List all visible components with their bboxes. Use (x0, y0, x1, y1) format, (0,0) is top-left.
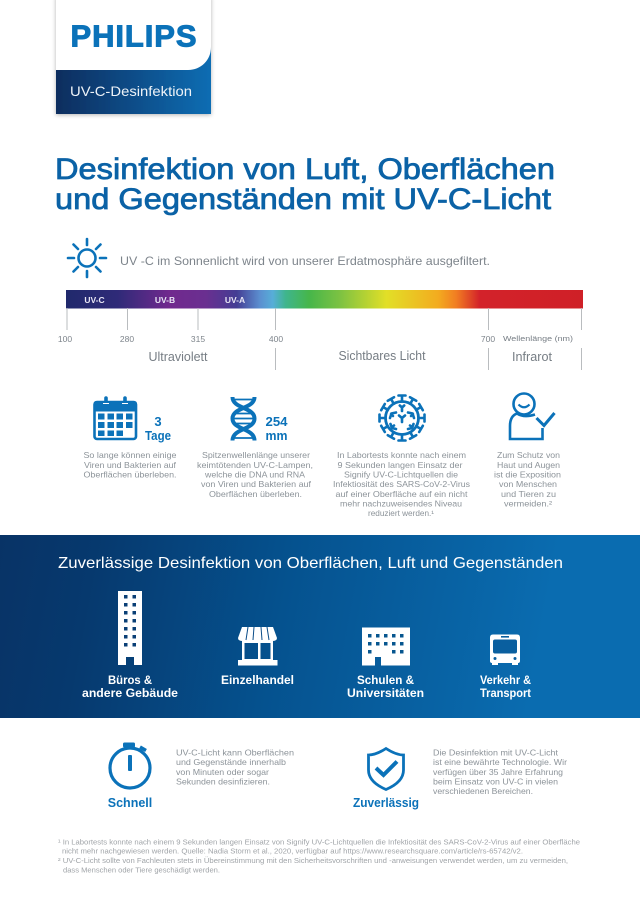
label: transport (480, 675, 531, 700)
figure: mm (266, 428, 288, 443)
band labels: UV-C (84, 295, 105, 305)
label: offices: andere Gebäude (82, 688, 178, 700)
fact: 3 days (84, 398, 177, 480)
range labels (148, 349, 553, 364)
icon: calendar (94, 398, 137, 439)
description: auf einer Oberfläche auf ein nicht (336, 490, 468, 499)
description: verschiedenen Bereichen. (433, 787, 533, 796)
figure: 254 (266, 414, 288, 429)
description: mehr nachzuweisendes Niveau (340, 500, 462, 508)
benefit: fast (108, 742, 294, 810)
description: Oberflächen überleben. (209, 490, 302, 499)
wavelength labels (58, 334, 573, 344)
description: keimtötenden UV-C-Lampen, (197, 461, 313, 470)
icon: shield with check (368, 748, 404, 790)
heading: Zuverlässig (353, 796, 419, 810)
description: Spitzenwellenlänge unserer (202, 451, 310, 460)
panel: applications band (0, 535, 640, 718)
title: und Gegenständen mit UV-C-Licht (55, 183, 552, 216)
fact: protection (494, 394, 561, 508)
description: und Tieren zu (501, 490, 556, 499)
band labels: UV-B (155, 295, 175, 305)
wavelength labels: Wellenlänge (nm) (503, 334, 573, 343)
description: 9 Sekunden langen Einsatz der (338, 461, 463, 470)
range labels: Sichtbares Licht (338, 349, 426, 363)
description: ist eine bewährte Technologie. Wir (433, 758, 567, 767)
description: und Gegenstände innerhalb (176, 758, 286, 767)
logo wordmark: PHILIPS (70, 18, 196, 54)
range labels: Ultraviolett (148, 350, 208, 364)
label: transport: Transport (480, 688, 531, 700)
description: So lange können einige (84, 451, 177, 460)
description (494, 451, 561, 508)
icon: office tower (118, 591, 142, 665)
description (176, 748, 294, 786)
description (197, 451, 313, 499)
description: verfügen über 35 Jahre Erfahrung (433, 768, 563, 777)
band heading: Zuverlässige Desinfektion von Oberflächen, Luft und Gegenständen (58, 555, 563, 572)
title (55, 153, 555, 216)
description: Signify UV-C-Lichtquellen die (344, 470, 458, 480)
band labels: UV-A (225, 295, 245, 305)
wavelength labels: 400 (269, 334, 283, 344)
description: von Minuten oder sogar (176, 768, 269, 777)
description: Haut und Augen (497, 461, 560, 470)
wavelength labels: 100 (58, 334, 72, 344)
description: Die Desinfektion mit UV-C-Licht (433, 748, 559, 758)
fact: virus inactivation (333, 396, 470, 518)
description: Viren und Bakterien auf (84, 461, 177, 470)
description: welche die DNA und RNA (204, 470, 306, 480)
description: von Menschen (499, 480, 557, 489)
description: vermeiden.² (504, 500, 552, 508)
description: Infektiosität des SARS-CoV-2-Virus (333, 480, 470, 489)
label: offices: Büros & (108, 675, 152, 687)
heading: Schnell (108, 796, 152, 810)
description (433, 748, 567, 796)
footnotes: ¹ In Labortests konnte nach einem 9 Sekunden langen Einsatz von Signify UV-C-Lichtquellen die Infektiosität des SARS-CoV-2-Virus auf einer Oberfläche (58, 840, 580, 846)
figure (266, 414, 288, 443)
description (333, 451, 470, 518)
band labels (84, 295, 245, 305)
icon: virus (380, 396, 424, 440)
wavelength labels: 315 (191, 334, 205, 344)
footnotes: dass Menschen oder Tiere geschädigt werden. (63, 868, 220, 874)
icon: sun (68, 239, 106, 277)
description: UV-C-Licht kann Oberflächen (176, 748, 294, 758)
Philips logo tab (56, 0, 211, 114)
description: ist die Exposition (494, 470, 561, 480)
figure: 3 (154, 414, 162, 429)
description: Sekunden desinfizieren. (176, 778, 270, 786)
footnotes (58, 840, 580, 874)
description: In Labortests konnte nach einem (337, 451, 466, 460)
description: reduziert werden.¹ (368, 509, 434, 518)
footnotes: ² UV-C-Licht sollte von Fachleuten stets in Übereinstimmung mit den Sicherheitsvorschriften und -anweisungen verwendet werden, um zu vermeiden, (58, 857, 568, 865)
footnotes: nicht mehr nachgewiesen werden. Quelle: Nadia Storm et al., 2020, verfügbar auf https://www.researchsquare.com/article/rs-65742/v2. (62, 848, 523, 856)
description (84, 451, 177, 480)
label: schools: Universitäten (347, 688, 424, 700)
sunlight statement: UV -C im Sonnenlicht wird von unserer Erdatmosphäre ausgefiltert. (120, 254, 490, 268)
spectrum bar (66, 290, 583, 308)
icon: person with check (510, 394, 554, 439)
label: schools: Schulen & (357, 675, 414, 687)
description: Oberflächen überleben. (84, 470, 176, 480)
fact: 254 nm (197, 397, 313, 499)
description: beim Einsatz von UV-C in vielen (433, 778, 558, 786)
range labels: Infrarot (512, 350, 553, 364)
label: transport: Verkehr & (480, 675, 531, 687)
icon: stopwatch (110, 742, 150, 788)
icon: school building (362, 628, 410, 666)
icon: retail store (238, 627, 278, 666)
label: schools (347, 675, 424, 700)
tab label: UV-C-Desinfektion (70, 83, 192, 99)
figure: Tage (145, 428, 171, 443)
spectrum chart (58, 290, 583, 370)
label: retail: Einzelhandel (221, 675, 294, 687)
figure (145, 414, 171, 443)
label: offices (82, 675, 178, 700)
wavelength labels: 700 (481, 334, 495, 344)
icon: bus (490, 634, 520, 665)
title: Desinfektion von Luft, Oberflächen (55, 153, 555, 186)
icon: DNA helix (232, 397, 255, 440)
benefit: reliable (353, 748, 567, 810)
wavelength labels: 280 (120, 334, 134, 344)
description: Zum Schutz von (497, 451, 560, 460)
description: von Viren und Bakterien auf (201, 480, 312, 489)
